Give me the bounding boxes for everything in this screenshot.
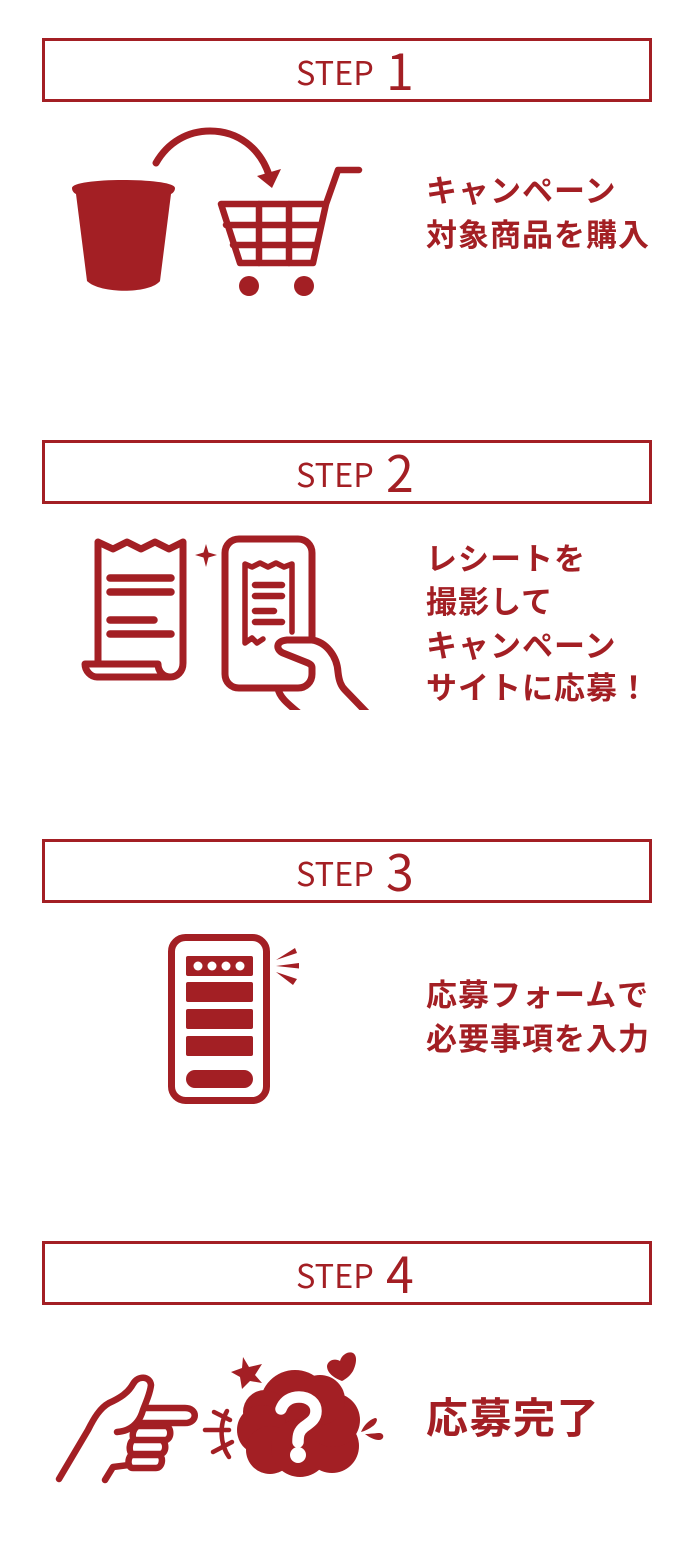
icon: sparkle [195, 544, 217, 567]
icon: smartphone entry form [172, 938, 299, 1100]
heading: step 2 [44, 435, 650, 507]
text: step 2 description: レシートを [426, 534, 586, 579]
icon: pointing hand [59, 1378, 195, 1480]
heading: step 1: 1 [386, 33, 414, 105]
icon: receipt [85, 542, 183, 677]
heading: step 3: STEP [296, 849, 374, 896]
text: step 3 description: 応募フォームで [426, 970, 649, 1015]
icon: heart [327, 1352, 356, 1381]
heading: step 1: STEP [296, 48, 374, 95]
text: step 2 description: サイトに応募！ [426, 663, 650, 708]
icon: receipt photographed with smartphone [85, 539, 372, 718]
heading: step 2: STEP [296, 450, 374, 497]
text: step 2 description: キャンペーン [426, 621, 616, 666]
heading: step 4: 4 [386, 1236, 414, 1308]
heading: step 4: STEP [296, 1251, 374, 1298]
icon: smartphone held in hand [225, 539, 372, 718]
heading: step 1 [44, 33, 650, 105]
text: step 1 description: キャンペーン [426, 166, 616, 211]
text: step 4 description: 応募完了 [426, 1385, 600, 1446]
text: step 2 description [426, 534, 650, 708]
icon: drops [361, 1418, 383, 1440]
heading: step 3 [44, 834, 650, 906]
text: step 1 description: 対象商品を購入 [426, 210, 650, 255]
heading: step 2: 2 [386, 435, 414, 507]
icon: star [231, 1357, 262, 1389]
text: step 3 description [426, 970, 650, 1059]
heading: step 3: 3 [386, 834, 414, 906]
heading: step 4 [44, 1236, 650, 1308]
text: step 2 description: 撮影して [426, 577, 553, 622]
text: step 3 description: 必要事項を入力 [426, 1014, 650, 1059]
icon: pointing hand and question cloud [59, 1352, 383, 1480]
text: step 1 description [426, 166, 650, 255]
icon: burst lines [205, 1411, 232, 1457]
icon: cup moving to shopping cart [72, 131, 359, 296]
icon: cloud with question mark [237, 1370, 360, 1477]
